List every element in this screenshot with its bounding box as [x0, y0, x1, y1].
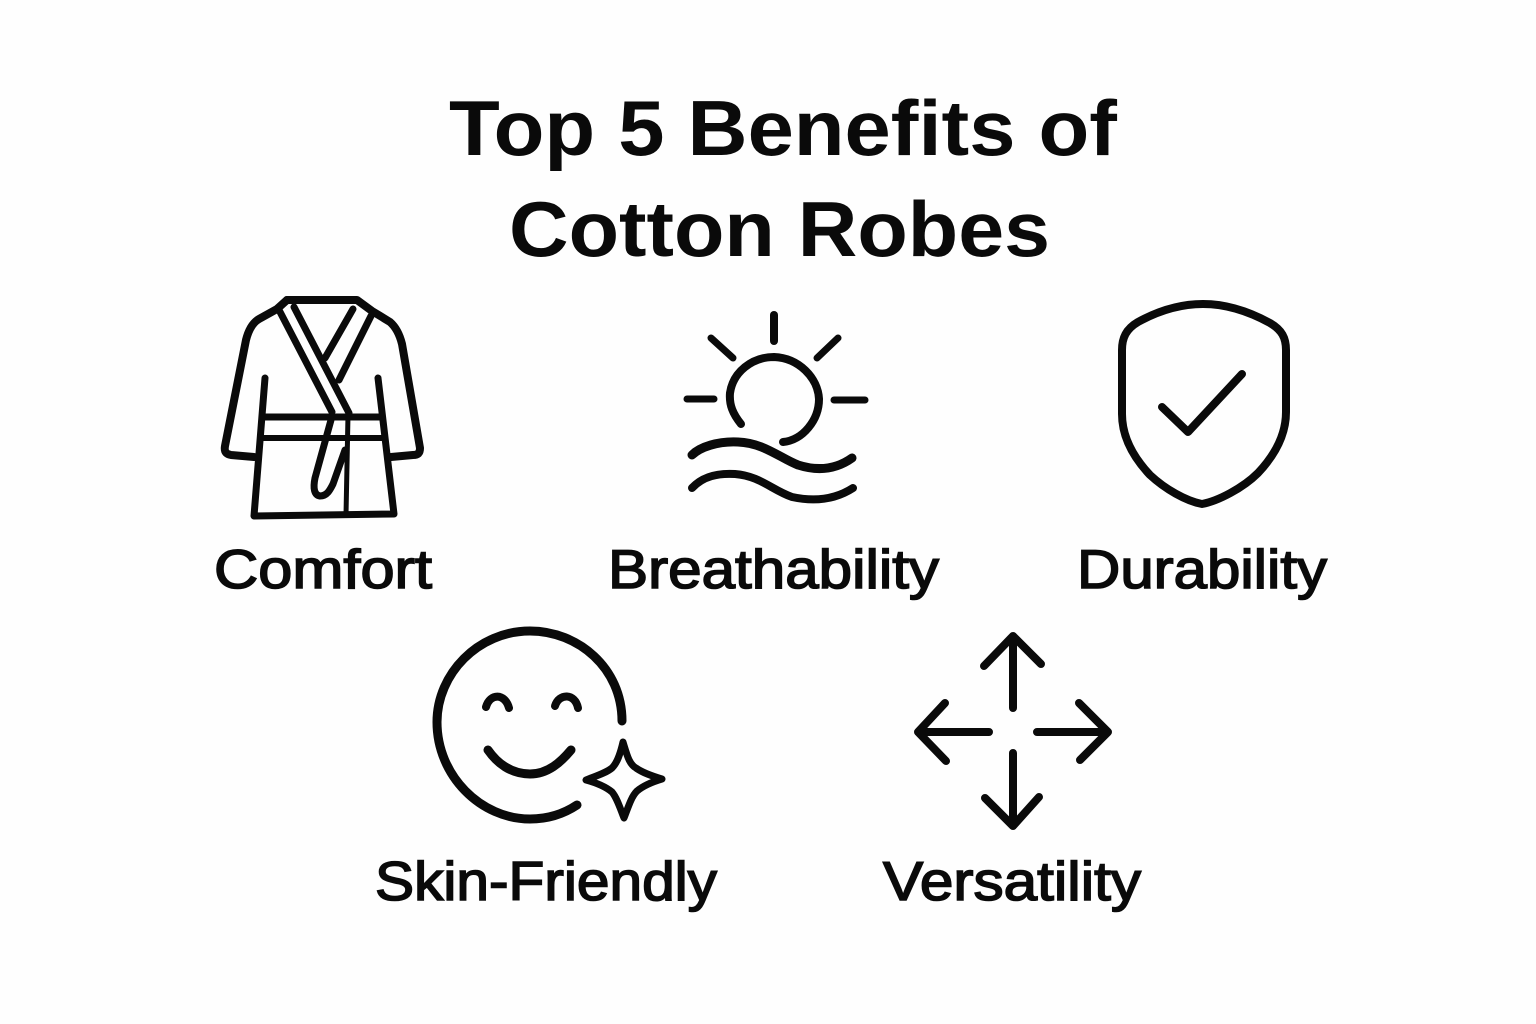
label: versatility: Versatility [883, 850, 1142, 912]
icon: sun over waves [687, 315, 865, 499]
icon: robe [225, 300, 420, 516]
label: skin-friendly: Skin-Friendly [375, 850, 718, 912]
label: durability: Durability [1077, 538, 1328, 600]
title: Cotton Robes [509, 185, 1050, 273]
icon: shield with check [1122, 304, 1286, 504]
icon: four-way arrows [918, 636, 1108, 826]
panel: breathability [608, 315, 940, 600]
icon: smiley with sparkle [437, 631, 662, 819]
label: comfort: Comfort [214, 538, 432, 600]
panel: versatility [883, 636, 1142, 912]
label: breathability: Breathability [608, 538, 940, 600]
panel: comfort [214, 300, 432, 600]
title [449, 84, 1118, 273]
panel: durability [1077, 304, 1328, 600]
panel: skin-friendly [375, 631, 718, 912]
title: Top 5 Benefits of [449, 84, 1118, 172]
